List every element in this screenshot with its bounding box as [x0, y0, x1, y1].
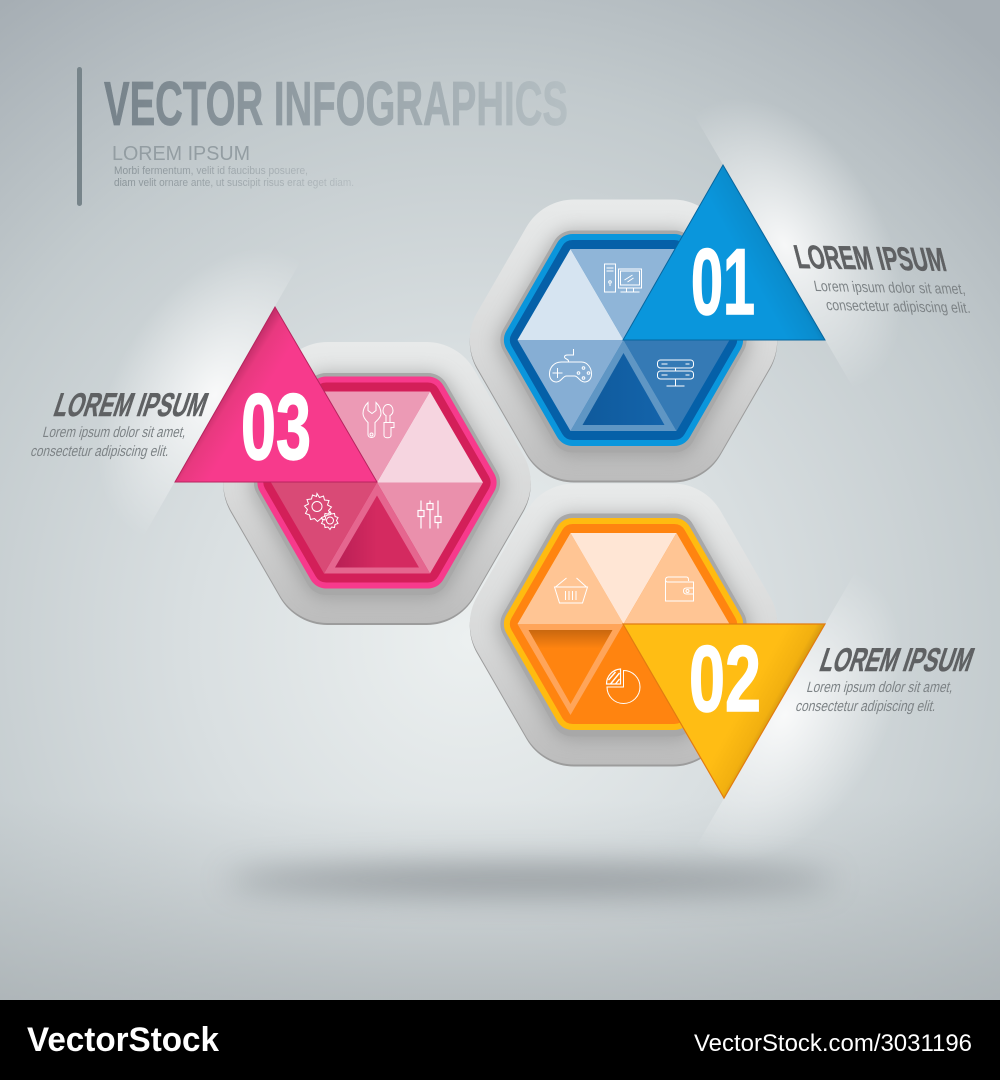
icon: gears: [304, 494, 338, 530]
sectors: [518, 533, 730, 715]
subtitle: LOREM IPSUM: [112, 143, 250, 165]
rim: [522, 252, 725, 431]
footer id: VectorStock.com/3031196: [694, 1030, 972, 1057]
number 01: 01: [691, 229, 755, 334]
icon: gamepad: [550, 349, 592, 382]
plate: [522, 538, 725, 715]
description: [794, 679, 955, 715]
ground shadow: [225, 865, 835, 895]
description: [29, 424, 188, 460]
description: [812, 278, 972, 317]
panel: hexagon 01 blue: [518, 249, 730, 431]
triangle 01 blue: [623, 165, 825, 340]
rim: [522, 535, 725, 715]
triangle 02 gold: [623, 624, 825, 798]
description: consectetur adipiscing elit.: [29, 443, 171, 460]
sectors: [518, 249, 730, 431]
panel: hexagon 02 orange: [518, 533, 730, 715]
intro text: Morbi fermentum, velit id faucibus posuere,: [114, 165, 308, 177]
icon: server: [658, 360, 694, 386]
label 02: [794, 642, 979, 715]
title: VECTOR INFOGRAPHICS: [104, 70, 568, 139]
label 03: [29, 387, 213, 460]
plate: [522, 254, 725, 431]
glow wedge: pink: [122, 278, 284, 504]
description: Lorem ipsum dolor sit amet,: [41, 424, 188, 441]
description: Lorem ipsum dolor sit amet,: [812, 278, 967, 298]
icon: basket: [554, 578, 588, 603]
glow wedge: blue: [708, 120, 883, 362]
description: Lorem ipsum dolor sit amet,: [805, 679, 955, 696]
plate: [275, 397, 479, 574]
triangle 03 pink: [175, 307, 377, 482]
sectors: [271, 392, 483, 574]
intro text line 2: diam velit ornare ante, ut suscipit risus erat eget diam.: [114, 177, 354, 189]
title bar: [77, 67, 82, 206]
rim: [275, 394, 479, 574]
glow wedge: gold: [716, 604, 878, 831]
icon: sliders: [418, 500, 441, 528]
heading: LOREM IPSUM: [49, 387, 213, 424]
description: consectetur adipiscing elit.: [794, 698, 938, 715]
icon: computer: [604, 264, 642, 292]
footer bar: [0, 1000, 1000, 1080]
icon: wallet: [666, 577, 694, 601]
bottom floor shade: [0, 800, 1000, 1000]
label 01: [791, 239, 972, 317]
panel: hexagon 03 pink: [271, 392, 483, 574]
footer logo: VectorStock: [27, 1021, 219, 1059]
icon: wrench and screwdriver: [363, 402, 394, 438]
number 02: 02: [689, 626, 761, 731]
number 03: 03: [241, 374, 311, 479]
icon: pie chart: [606, 669, 640, 704]
description: consectetur adipiscing elit.: [824, 297, 972, 317]
